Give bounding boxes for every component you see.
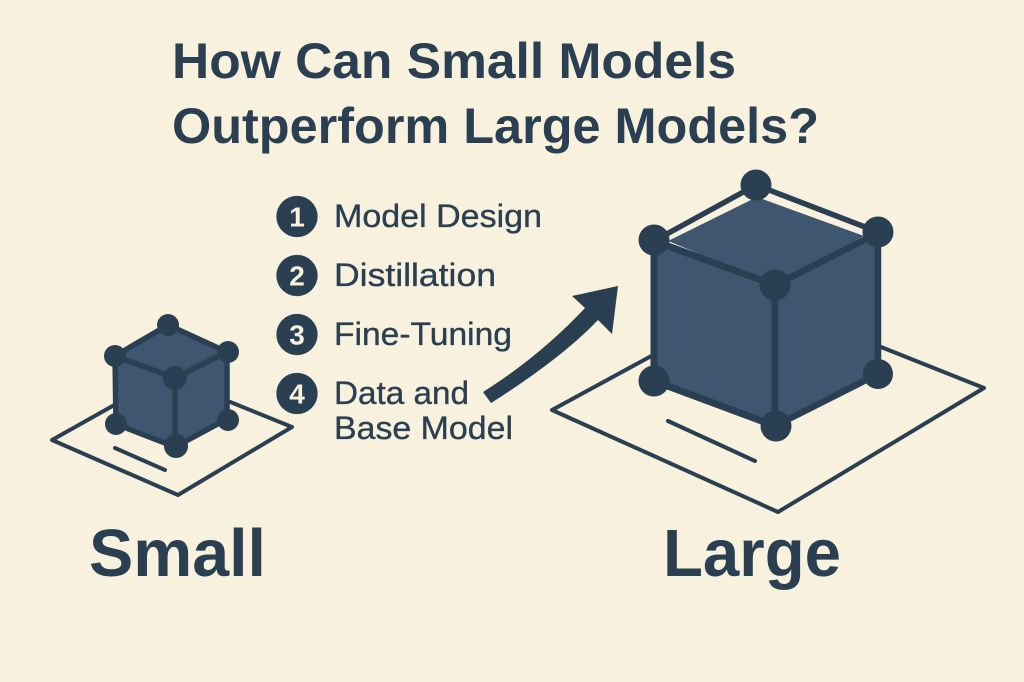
top edges <box>654 185 878 241</box>
step 4: Base Model <box>334 410 513 446</box>
step 1 <box>276 196 542 237</box>
label large: Large <box>663 516 841 591</box>
cube small <box>115 325 227 447</box>
step 4: Data and <box>334 375 469 411</box>
step 4 <box>276 373 513 446</box>
label small: Small <box>89 516 266 591</box>
right face <box>775 233 878 426</box>
step 2 <box>276 255 496 296</box>
arrow <box>483 286 618 403</box>
step 1: 1 <box>289 202 305 232</box>
steps list <box>276 196 542 446</box>
step 3: 3 <box>289 320 305 350</box>
step 3 <box>276 314 512 355</box>
title: How Can Small Models <box>172 33 736 89</box>
step 1: Model Design <box>334 198 542 234</box>
cube large <box>654 185 878 426</box>
top face <box>668 197 864 285</box>
small model <box>52 314 292 495</box>
platform large <box>552 298 984 512</box>
step 4: 4 <box>289 378 305 410</box>
platform small <box>52 376 292 495</box>
step 2: Distillation <box>334 257 496 293</box>
title: Outperform Large Models? <box>172 98 819 154</box>
large model <box>552 170 984 512</box>
step 3: Fine-Tuning <box>334 316 512 352</box>
left face <box>654 241 775 426</box>
step 2: 2 <box>289 260 305 292</box>
title <box>172 33 819 154</box>
